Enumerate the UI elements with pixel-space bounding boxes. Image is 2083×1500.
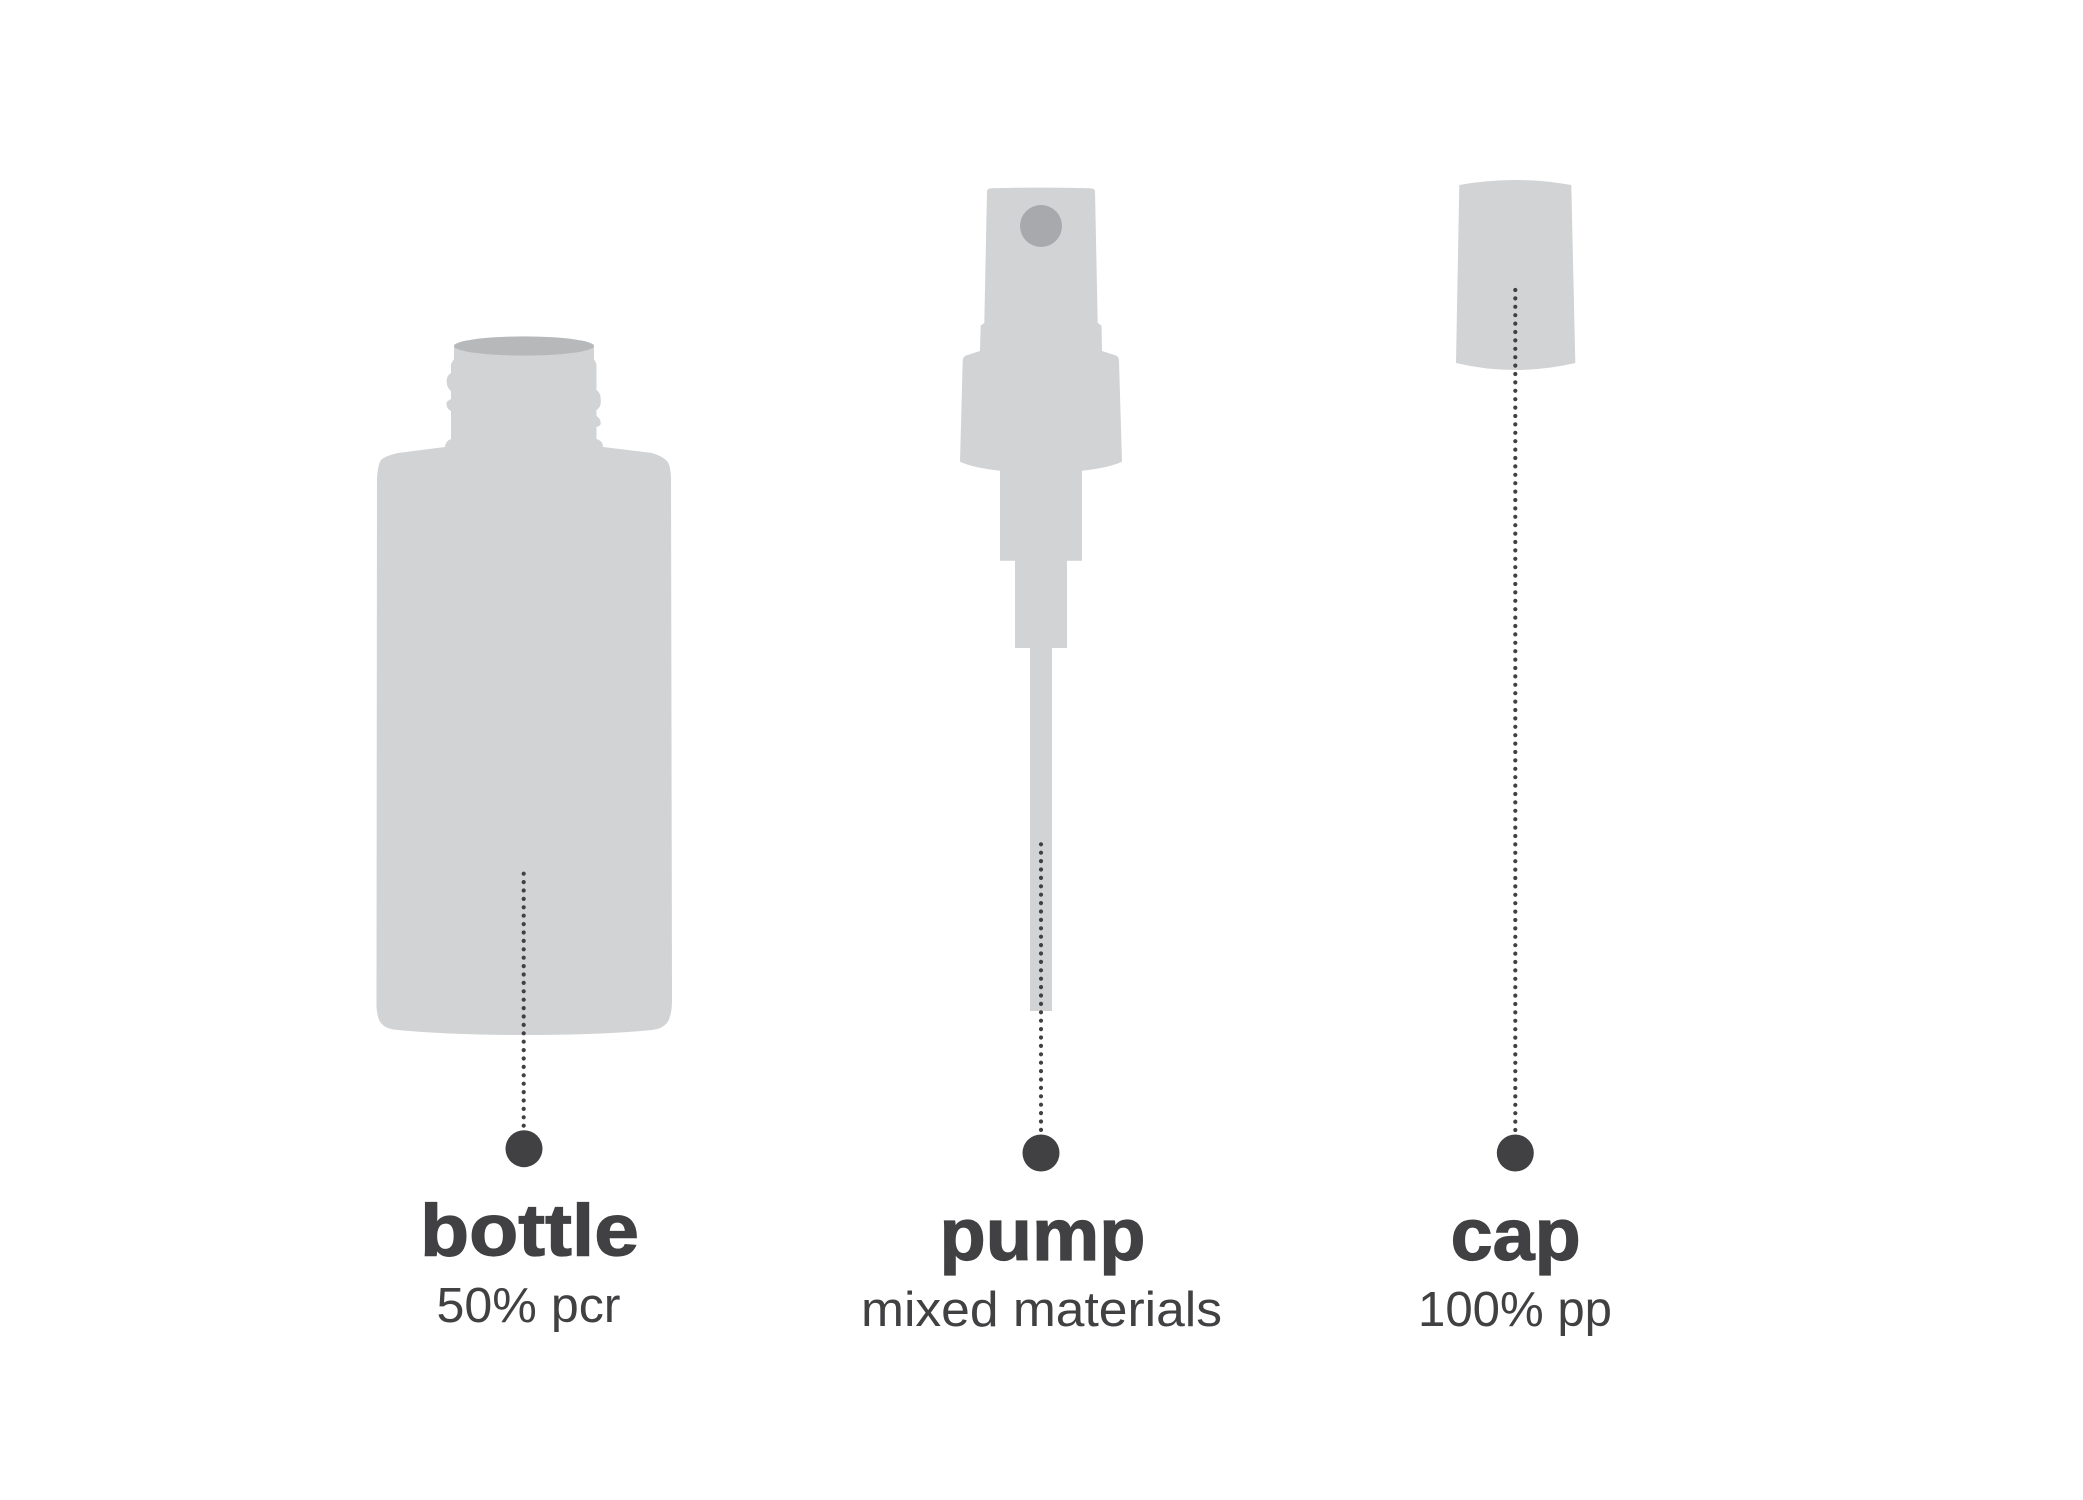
heading: bottle: bottle bbox=[420, 1190, 639, 1272]
text: pump material: mixed materials bbox=[861, 1283, 1222, 1337]
icon: pump nozzle bbox=[1020, 205, 1062, 247]
dotted leader: bottle bbox=[522, 874, 526, 1126]
marker dot: bottle bbox=[506, 1130, 542, 1167]
icon: cap silhouette bbox=[1456, 180, 1575, 370]
text: bottle material: 50% pcr bbox=[436, 1279, 620, 1333]
text: cap material: 100% pp bbox=[1418, 1283, 1612, 1337]
icon: bottle silhouette bbox=[376, 346, 672, 1035]
heading: cap: cap bbox=[1451, 1195, 1581, 1276]
marker dot: pump bbox=[1022, 1134, 1060, 1172]
heading: pump: pump bbox=[940, 1195, 1146, 1276]
panel: pump bbox=[861, 188, 1222, 1337]
panel: cap bbox=[1418, 180, 1612, 1337]
dotted leader: cap bbox=[1513, 290, 1517, 1130]
icon: bottle opening bbox=[454, 336, 594, 356]
dotted leader: pump bbox=[1039, 844, 1043, 1130]
marker dot: cap bbox=[1497, 1134, 1534, 1172]
panel: bottle bbox=[376, 336, 672, 1333]
icon: pump silhouette bbox=[960, 188, 1122, 1011]
